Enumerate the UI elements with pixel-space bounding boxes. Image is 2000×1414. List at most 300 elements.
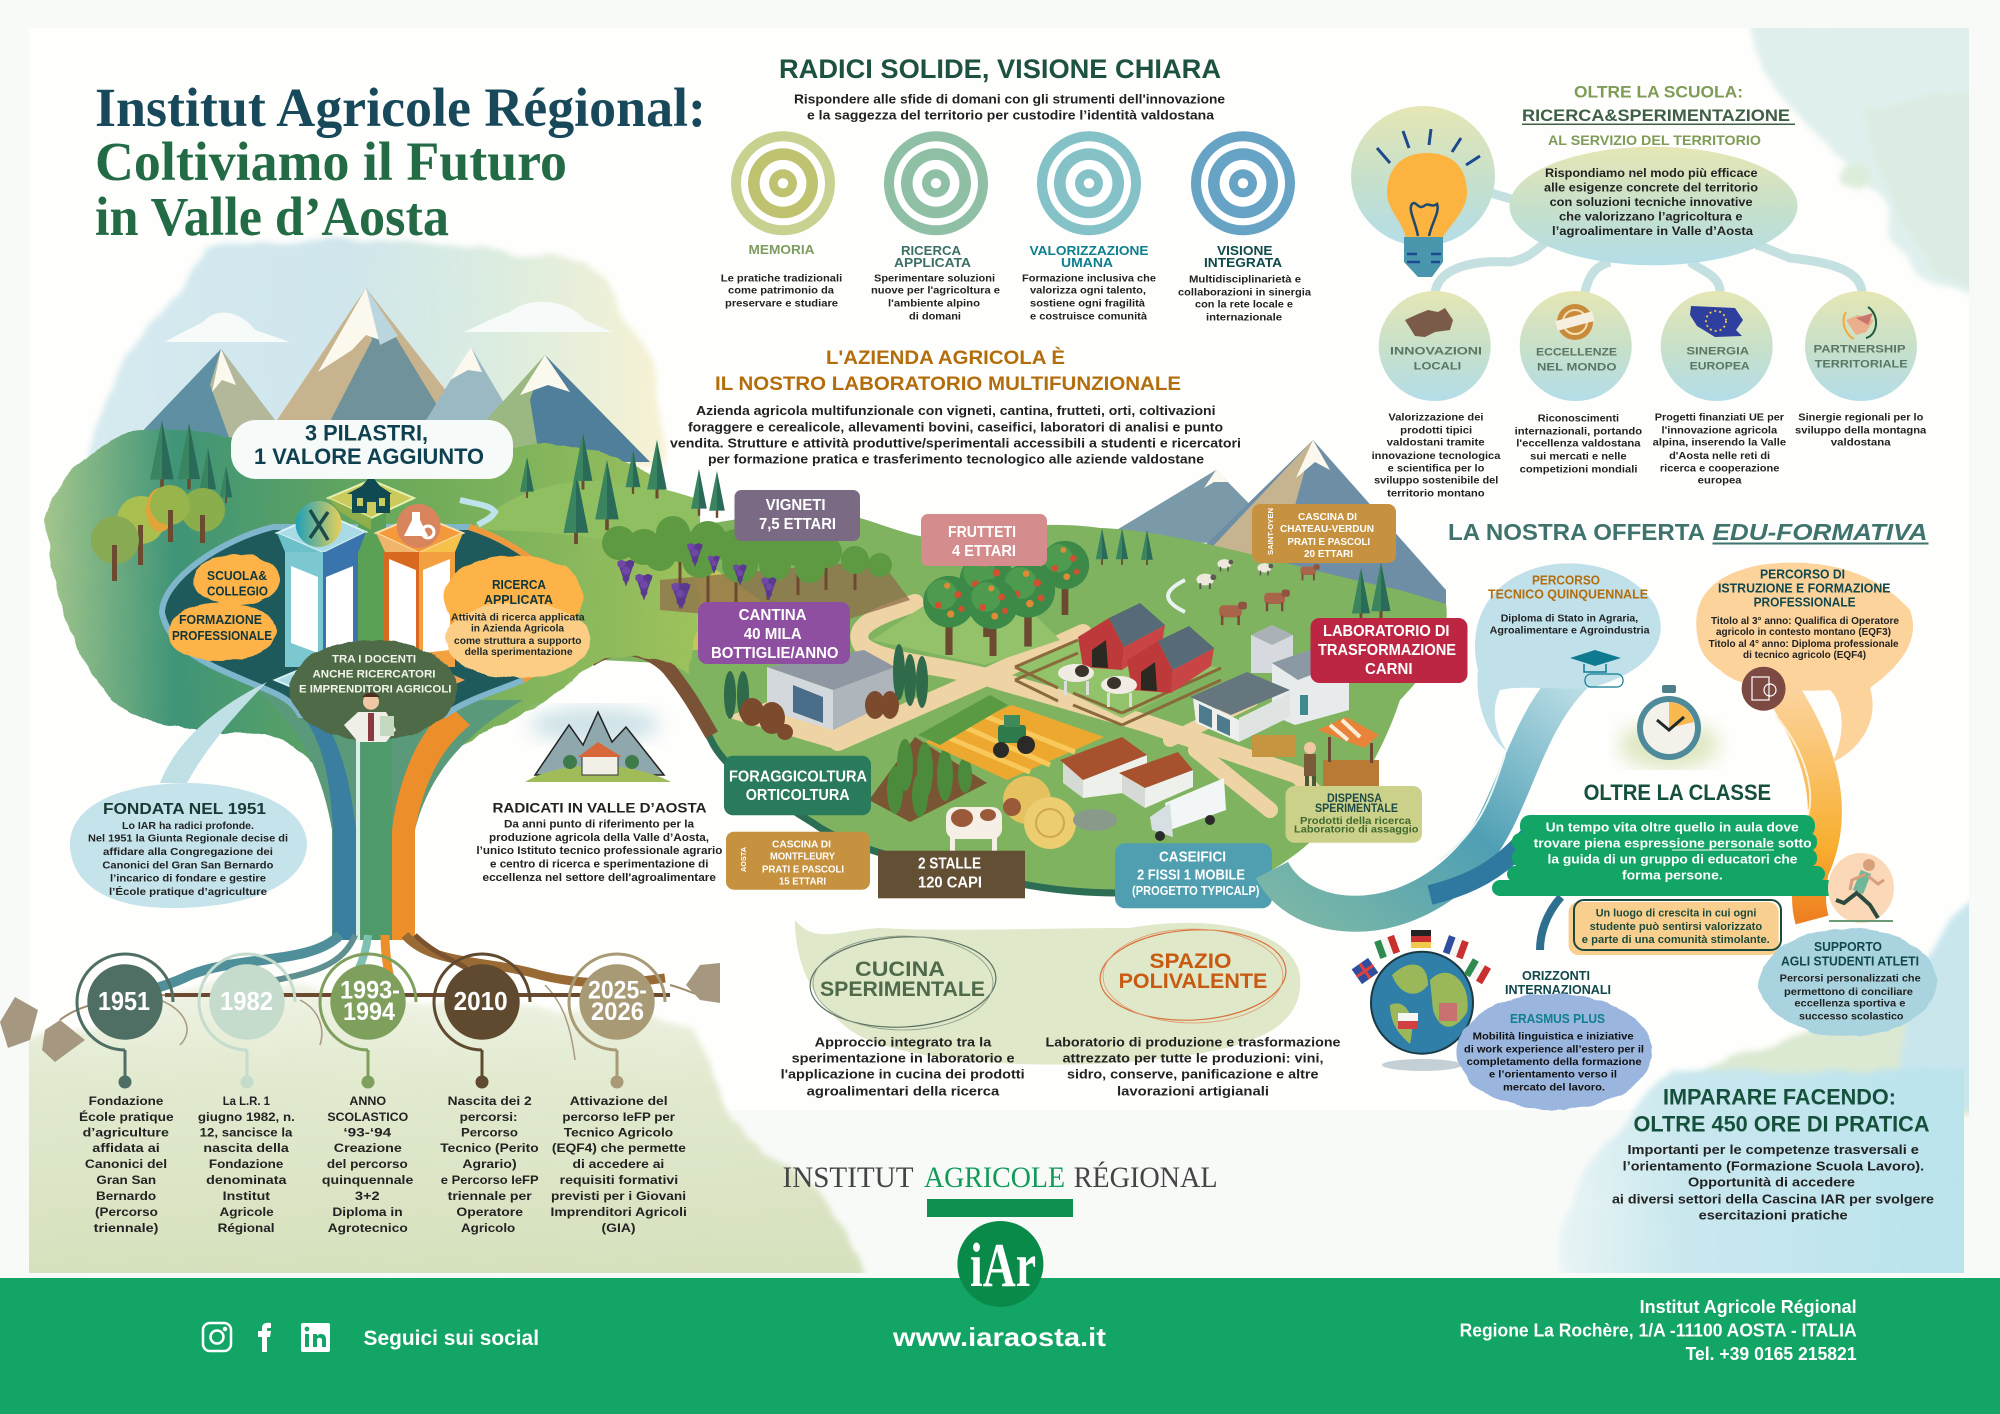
node: 1951	[77, 954, 173, 1088]
heading	[1448, 519, 1928, 545]
text: sinergia: d'Aosta nelle reti di	[1669, 450, 1770, 462]
text: 2010: Operatore	[456, 1205, 523, 1219]
callout: percorso istruzione: Titolo al 3° anno: Qualifica di Operatore	[1711, 616, 1899, 627]
text: 1993: quinquennale	[322, 1173, 414, 1187]
heading: cucina sperimentale: CUCINA	[855, 958, 945, 981]
label: caseifici: 2 FISSI 1 MOBILE	[1137, 866, 1245, 883]
callout: ricerca applicata: della sperimentazione	[465, 647, 573, 658]
label: caseifici	[1115, 843, 1272, 908]
icon: light bulb	[1351, 106, 1495, 277]
footer: address: Tel. +39 0165 215821	[1686, 1344, 1857, 1364]
node: 2010: 2010	[454, 986, 508, 1016]
illustration: tree canopy	[45, 420, 725, 777]
panel: imparare facendo: Importanti per le competenze trasversali e	[1628, 1142, 1919, 1157]
icon: facebook	[258, 1323, 271, 1352]
panel: imparare facendo: l’orientamento (Formazione Scuola Lavoro).	[1623, 1159, 1924, 1174]
label: laboratorio carni: TRASFORMAZIONE	[1318, 642, 1456, 659]
farm: crop field and tractor	[869, 695, 1104, 822]
text: 1951: Fondazione	[89, 1094, 164, 1108]
farm: pines right	[1096, 528, 1391, 622]
label: foraggicoltura: ORTICOLTURA	[746, 787, 850, 804]
farm: houses and truck	[1060, 737, 1226, 841]
text: visione integrata: Multidisciplinarietà e	[1189, 274, 1301, 286]
icon: ring ricerca	[884, 131, 988, 235]
farm: orchard	[872, 541, 1089, 665]
text: ricerca applicata: APPLICATA	[894, 255, 972, 270]
wash	[795, 920, 1300, 1065]
watercolour: bottom left wash	[20, 984, 866, 1285]
callout: ricerca applicata: Attività di ricerca applicata	[451, 613, 585, 624]
callout: supporto studenti atleti: Percorsi personalizzati che	[1780, 973, 1921, 985]
text: partnership: sviluppo della montagna	[1795, 425, 1926, 437]
callout: rispondiamo: Rispondiamo nel modo più efficace	[1545, 168, 1758, 180]
text: ricerca applicata: nuove per l'agricoltura e	[871, 285, 1000, 297]
callout: docenti: E IMPRENDITORI AGRICOLI	[299, 684, 452, 696]
farm: processing buildings	[1190, 625, 1349, 742]
callout: supporto studenti atleti: eccellenza sportiva e	[1794, 998, 1906, 1010]
text: 2025: Tecnico Agricolo	[564, 1126, 673, 1140]
text: 1951: Canonici del	[85, 1157, 167, 1171]
text: sinergia: l'innovazione agricola	[1662, 425, 1777, 437]
text: radicati in valle: eccellenza nel settore dell'agroalimentare	[482, 872, 716, 884]
label: cascina chateau-verdun: SAINT-OYEN	[1266, 508, 1275, 555]
item: partnership territoriale: TERRITORIALE	[1815, 358, 1908, 370]
callout: docenti: TRA I DOCENTI	[332, 654, 416, 666]
illustration: farm island ground	[530, 440, 1447, 893]
panel: imparare facendo: Opportunità di accedere	[1688, 1175, 1855, 1190]
label: cascina chateau-verdun	[1252, 504, 1396, 563]
text: valorizzazione umana: sostiene ogni fragilità	[1030, 298, 1145, 310]
callout: ricerca applicata: RICERCA	[492, 578, 546, 592]
text: 1993: ‘93-‘94	[343, 1126, 392, 1140]
callout: percorso tecnico: Agroalimentare e Agroindustria	[1490, 624, 1650, 636]
subtitle: e la saggezza del territorio per custodire l’identità valdostana	[807, 107, 1215, 122]
heading: 3 pilastri: 1 VALORE AGGIUNTO	[254, 444, 484, 469]
text: 1982: Régional	[218, 1221, 274, 1235]
text: valorizzazione umana: VALORIZZAZIONE	[1030, 243, 1149, 258]
text: innovazioni	[1372, 412, 1501, 500]
farm: barns	[1015, 603, 1221, 725]
label: laboratorio carni	[1310, 618, 1468, 683]
footer: address: Regione La Rochère, 1/A -11100 AOSTA - ITALIA	[1460, 1321, 1857, 1341]
callout: erasmus plus: ERASMUS PLUS	[1510, 1011, 1605, 1026]
heading: LA NOSTRA OFFERTA	[1448, 519, 1705, 545]
farm: vineyard	[602, 516, 910, 625]
label: cascina chateau-verdun: 20 ETTARI	[1304, 548, 1353, 560]
label: dispensa: Laboratorio di assaggio	[1294, 824, 1418, 836]
icon: instagram	[203, 1323, 231, 1351]
callout: fondata nel 1951	[70, 682, 307, 908]
item: partnership territoriale: PARTNERSHIP	[1814, 344, 1906, 356]
text: 1982: Agricole	[220, 1205, 274, 1219]
label: foraggicoltura	[724, 756, 871, 815]
label: dispensa	[1286, 786, 1422, 843]
callout: tempo vita: trovare piena espressione personale sotto	[1534, 836, 1812, 851]
callout: supporto studenti atleti: AGLI STUDENTI ATLETI	[1781, 954, 1919, 968]
node: 1993-1994: 1994	[343, 998, 395, 1026]
text: 2010	[440, 1094, 539, 1235]
text: 1993: Agrotecnico	[328, 1221, 408, 1235]
callout: docenti	[289, 640, 457, 742]
text: sinergia	[1653, 412, 1786, 487]
text: memoria: Le pratiche tradizionali	[721, 273, 842, 285]
text: 1982: La L.R. 1	[223, 1094, 270, 1108]
heading: azienda agricola: L'AZIENDA AGRICOLA È	[826, 346, 1065, 369]
label: vigneti: 7,5 ETTARI	[759, 516, 836, 533]
heading: spazio polivalente	[1098, 925, 1288, 1025]
dark leaf background	[162, 527, 573, 715]
text: valorizzazione umana	[1022, 243, 1156, 322]
logo	[782, 1161, 1218, 1307]
text: memoria: MEMORIA	[748, 242, 815, 257]
node: 2025-2026	[569, 954, 665, 1088]
heading: oltre la classe: OLTRE LA CLASSE	[1584, 780, 1771, 805]
text: eccellenze: Riconoscimenti	[1538, 413, 1619, 425]
text: 1993: ANNO	[349, 1094, 386, 1108]
text: innovazioni: e scientifica per lo	[1388, 463, 1484, 475]
callout: percorso istruzione: PERCORSO DI	[1760, 568, 1845, 582]
label: stalle: 120 CAPI	[918, 874, 982, 891]
callout: fondata nel 1951: l’incarico di fondare e gestire	[110, 873, 266, 885]
heading: orizzonti internazionali: ORIZZONTI	[1522, 969, 1590, 983]
heading: spazio polivalente: POLIVALENTE	[1119, 970, 1267, 993]
node: 2025-2026: 2025-	[588, 977, 647, 1005]
text: innovazioni: Valorizzazione dei	[1388, 412, 1484, 424]
text: spazio: sidro, conserve, panificazione e altre	[1067, 1067, 1318, 1082]
label: cantina: CANTINA	[739, 607, 807, 624]
icon: linkedin	[301, 1323, 330, 1352]
text: partnership: valdostana	[1831, 437, 1891, 449]
panel: imparare facendo	[1612, 1084, 1934, 1223]
heading: formazione: PROFESSIONALE	[172, 629, 272, 643]
label: dispensa: DISPENSA	[1327, 793, 1382, 805]
label: stalle: 2 STALLE	[918, 855, 981, 872]
callout: percorso istruzione: di tecnico agricolo (EQF4)	[1743, 650, 1866, 661]
watercolour: top right	[1750, 28, 1969, 295]
label: caseifici: (PROGETTO TYPICALP)	[1132, 884, 1260, 898]
heading: formazione	[167, 603, 277, 661]
callout: rispondiamo	[1510, 147, 1798, 265]
label: cascina chateau-verdun: CASCINA DI	[1298, 511, 1357, 523]
text: ricerca applicata	[871, 243, 1000, 322]
text: partnership	[1795, 412, 1926, 449]
heading: OLTRE LA SCUOLA:	[1574, 83, 1743, 101]
text: 1951: Gran San	[96, 1173, 156, 1187]
text: spazio: lavorazioni artigianali	[1117, 1084, 1269, 1099]
item: innovazioni locali: INNOVAZIONI	[1390, 346, 1482, 358]
item: eccellenze nel mondo	[1520, 291, 1632, 401]
heading: orizzonti internazionali: INTERNAZIONALI	[1505, 983, 1611, 997]
text: 1982: denominata	[206, 1173, 287, 1187]
node: 1982	[199, 954, 295, 1088]
text: innovazioni: sviluppo sostenibile del	[1374, 475, 1498, 487]
roots and vine	[60, 935, 720, 1060]
item: innovazioni locali: LOCALI	[1414, 360, 1461, 372]
timeline	[77, 954, 687, 1235]
logo: RÉGIONAL	[1074, 1161, 1218, 1194]
item: sinergia europea: SINERGIA	[1686, 346, 1749, 358]
text: 1993: SCOLASTICO	[327, 1110, 408, 1124]
text: ricerca applicata: di domani	[909, 310, 961, 322]
text: memoria: come patrimonio da	[728, 285, 834, 297]
callout: supporto studenti atleti: successo scolastico	[1799, 1011, 1904, 1023]
footer: address: Institut Agricole Régional	[1640, 1297, 1857, 1317]
callout: percorso tecnico: PERCORSO	[1532, 574, 1600, 588]
text: spazio	[1046, 1035, 1340, 1099]
callout: un luogo di crescita: studente può sentirsi valorizzato	[1590, 921, 1762, 933]
icon: tools	[296, 501, 342, 547]
heading: azienda agricola	[715, 346, 1181, 395]
text: eccellenze: l'eccellenza valdostana	[1516, 438, 1641, 450]
heading: orizzonti internazionali	[1505, 969, 1611, 997]
text: 1951: affidata ai	[92, 1141, 160, 1155]
heading: scuola: SCUOLA&	[207, 569, 267, 583]
label: cantina: 40 MILA	[744, 626, 802, 643]
callout: percorso tecnico: TECNICO QUINQUENNALE	[1488, 588, 1648, 602]
callout: un luogo di crescita	[1569, 900, 1781, 955]
heading: azienda agricola: IL NOSTRO LABORATORIO MULTIFUNZIONALE	[715, 373, 1181, 395]
heading: RADICI SOLIDE, VISIONE CHIARA	[779, 54, 1221, 84]
label: frutteti	[921, 514, 1047, 566]
text: 1951: d’agriculture	[83, 1126, 169, 1140]
text: visione integrata: collaborazioni in sinergia	[1178, 286, 1311, 298]
text: cucina: sperimentazione in laboratorio e	[792, 1051, 1015, 1066]
callout: fondata nel 1951: FONDATA NEL 1951	[103, 801, 266, 818]
text: 1951: Bernardo	[96, 1189, 156, 1203]
label: cantina	[698, 602, 850, 664]
text: 2025: previsti per i Giovani	[551, 1189, 686, 1203]
farm: animals	[1168, 559, 1320, 625]
text: 2010: Tecnico (Perito	[440, 1141, 539, 1155]
text: visione integrata: internazionale	[1206, 312, 1282, 324]
callout: fondata nel 1951: Nel 1951 la Giunta Regionale decise di	[88, 833, 288, 845]
icon: stopwatch	[1619, 685, 1719, 770]
logo: AGRICOLE	[924, 1161, 1065, 1194]
item: sinergia europea	[1661, 291, 1773, 401]
text: ricerca applicata: Sperimentare soluzioni	[874, 273, 995, 285]
pillar: right	[376, 515, 465, 700]
callout: ricerca applicata: come struttura a supporto	[454, 636, 582, 647]
text: innovazioni: territorio montano	[1387, 488, 1485, 500]
label: dispensa: Prodotti della ricerca	[1300, 815, 1411, 827]
node: 1951: 1951	[98, 986, 150, 1016]
callout: tempo vita: la guida di un gruppo di educatori che	[1548, 852, 1798, 867]
panel: imparare facendo: IMPARARE FACENDO:	[1663, 1084, 1896, 1109]
title	[95, 77, 706, 247]
label: frutteti: 4 ETTARI	[952, 543, 1016, 560]
text: 2025: requisiti formativi	[560, 1173, 678, 1187]
text: eccellenze: competizioni mondiali	[1520, 464, 1638, 476]
node: 1982: 1982	[220, 986, 273, 1016]
text: 1993: Diploma in	[332, 1205, 403, 1219]
text: azienda agricola: foraggere e cerealicole, allevamenti bovini, caseifici, laboratori di analisi e punto	[688, 421, 1223, 435]
text: 1951	[79, 1094, 174, 1235]
callout: tempo vita: Un tempo vita oltre quello in aula dove	[1546, 820, 1799, 835]
label: foraggicoltura: FORAGGICOLTURA	[729, 768, 867, 785]
item: eccellenze nel mondo: ECCELLENZE	[1536, 347, 1617, 359]
text: radicati in valle: produzione agricola della Valle d’Aosta,	[489, 832, 709, 844]
text: 1951: triennale)	[94, 1221, 158, 1235]
text: azienda agricola	[670, 404, 1241, 466]
text: visione integrata: con la rete locale e	[1195, 298, 1293, 310]
panel: cucina e spazio	[781, 920, 1340, 1099]
decoration: vine leaves	[0, 963, 720, 1062]
text: 1993: del percorso	[327, 1157, 408, 1171]
label: stalle	[878, 851, 1025, 898]
node: 2010	[434, 954, 530, 1088]
farm: winery	[724, 644, 928, 740]
callout: tempo vita	[1492, 815, 1836, 896]
text: 1982	[198, 1094, 295, 1235]
title: Coltiviamo il Futuro	[95, 131, 567, 192]
icon: globe with flags	[1352, 930, 1491, 1071]
farm: market stall	[1252, 717, 1379, 789]
callout: fondata nel 1951: Lo IAR ha radici profonde.	[122, 820, 254, 832]
subtitle	[794, 91, 1225, 122]
text: azienda agricola: per formazione pratica e trasferimento tecnologico alle aziende valdostane	[708, 452, 1204, 466]
label: caseifici: CASEIFICI	[1159, 849, 1226, 866]
heading: cucina sperimentale: SPERIMENTALE	[820, 978, 985, 1001]
text: radicati in valle	[476, 800, 723, 884]
text: visione integrata: VISIONE	[1217, 243, 1273, 258]
text: 1993: Creazione	[334, 1141, 402, 1155]
text: 2010: Agricolo	[461, 1221, 515, 1235]
text: 2010: e Percorso IeFP	[441, 1173, 539, 1187]
heading: spazio polivalente: SPAZIO	[1150, 950, 1232, 973]
callout: supporto studenti atleti: permettono di conciliare	[1784, 986, 1913, 998]
panel: blue wash behind imparare facendo	[1559, 1067, 1964, 1273]
text: eccellenze: internazionali, portando	[1515, 426, 1642, 438]
text: azienda agricola: vendita. Strutture e attività produttive/sperimentali accessibili a studenti e ricercatori	[670, 436, 1241, 450]
ribbon: blue	[1272, 675, 1575, 950]
callout: erasmus plus: di work experience all’estero per il	[1464, 1044, 1644, 1056]
text: 2010: Percorso	[461, 1126, 518, 1140]
callout: erasmus plus: mercato del lavoro.	[1503, 1082, 1605, 1094]
text: 1982: nascita della	[203, 1141, 289, 1155]
text: partnership: Sinergie regionali per lo	[1798, 412, 1923, 424]
text: sinergia: Progetti finanziati UE per	[1655, 412, 1784, 424]
panel: offerta edu-formativa	[1272, 519, 1928, 955]
callout: fondata nel 1951: l’École pratique d’agriculture	[109, 885, 267, 898]
callout: erasmus plus: completamento della formazione	[1467, 1056, 1642, 1068]
icon: valley village	[525, 707, 671, 782]
heading: oltre la classe	[1555, 770, 1785, 810]
text: 2025: (EQF4) che permette	[552, 1141, 686, 1155]
callout: un luogo di crescita: e parte di una comunità stimolante.	[1582, 934, 1770, 946]
text: sinergia: ricerca e cooperazione	[1660, 463, 1780, 475]
label: laboratorio carni: LABORATORIO DI	[1323, 623, 1450, 640]
label: dispensa: SPERIMENTALE	[1315, 803, 1398, 815]
callout: ricerca applicata: APPLICATA	[484, 593, 553, 607]
icon: school	[347, 475, 392, 513]
heading: scuola	[194, 555, 280, 605]
text: 2010: Agrario)	[462, 1157, 517, 1171]
text: cucina	[781, 1035, 1025, 1099]
title: in Valle d’Aosta	[95, 186, 449, 247]
text: 2025: percorso IeFP per	[562, 1110, 675, 1124]
text: radicati in valle: e centro di ricerca e sperimentazione di	[490, 858, 708, 870]
heading: formazione: FORMAZIONE	[179, 613, 262, 627]
text: 2025: (GIA)	[602, 1221, 636, 1235]
text: innovazioni: prodotti tipici	[1400, 425, 1472, 437]
panel: imparare facendo: OLTRE 450 ORE DI PRATICA	[1634, 1112, 1930, 1137]
text: seguici: Seguici sui social	[364, 1327, 539, 1350]
subtitle: Rispondere alle sfide di domani con gli strumenti dell'innovazione	[794, 91, 1225, 106]
text: radicati in valle: l’unico Istituto tecnico professionale agrario	[476, 845, 723, 857]
footer: website: www.iaraosta.it	[892, 1322, 1106, 1352]
callout: ricerca applicata: in Azienda Agricola	[471, 624, 564, 635]
text: 1982: 12, sancisce la	[200, 1126, 293, 1140]
callout: percorso istruzione: agricolo in contesto montano (EQF3)	[1716, 627, 1891, 638]
logo: INSTITUT	[782, 1161, 914, 1194]
item: eccellenze nel mondo: NEL MONDO	[1537, 361, 1617, 373]
label: cascina montfleury: PRATI E PASCOLI	[762, 863, 844, 875]
text: 1993: 3+2	[355, 1189, 380, 1203]
icon: runner	[1828, 853, 1894, 923]
callout: rispondiamo: con soluzioni tecniche innovative	[1550, 197, 1753, 209]
branches	[1435, 190, 1862, 292]
text: valorizzazione umana: valorizza ogni talento,	[1030, 285, 1146, 297]
text: 2010: percorsi:	[460, 1110, 518, 1124]
callout: percorso istruzione	[1696, 563, 1913, 762]
label: vigneti	[734, 490, 860, 541]
text: 2025: di accedere ai	[572, 1157, 664, 1171]
heading: RICERCA&SPERIMENTAZIONE	[1522, 107, 1790, 125]
callout: percorso istruzione: Titolo al 4° anno: Diploma professionale	[1709, 639, 1899, 650]
text: 1982: giugno 1982, n.	[198, 1110, 295, 1124]
text: valorizzazione umana: UMANA	[1061, 255, 1114, 270]
label: cascina montfleury: MONTFLEURY	[770, 850, 835, 862]
text: cucina: l'applicazione in cucina dei prodotti	[781, 1067, 1025, 1082]
panel: oltre la scuola	[1351, 83, 1926, 500]
text: spazio: Laboratorio di produzione e trasformazione	[1046, 1035, 1340, 1050]
node: 1993-1994	[320, 954, 416, 1088]
label: cascina chateau-verdun: PRATI E PASCOLI	[1288, 536, 1370, 548]
text: cucina: agroalimentari della ricerca	[807, 1084, 1000, 1099]
text: 2025: Imprenditori Agricoli	[550, 1205, 687, 1219]
text: 1982: Fondazione	[209, 1157, 284, 1171]
label: vigneti: VIGNETI	[766, 497, 826, 514]
panel: imparare facendo: ai diversi settori della Cascina IAR per svolgere	[1612, 1192, 1934, 1207]
heading	[1522, 83, 1795, 148]
callout: percorso istruzione: PROFESSIONALE	[1754, 596, 1856, 610]
icon: flask gear	[397, 504, 441, 548]
footer band	[0, 1278, 2000, 1414]
text: 2025: Attivazione del	[570, 1094, 668, 1108]
text: radicati in valle: RADICATI IN VALLE D’AOSTA	[492, 800, 706, 816]
label: cascina montfleury	[726, 832, 870, 890]
watercolour: bottom right	[1705, 899, 1969, 1117]
icon: ring valorizzazione	[1037, 131, 1141, 235]
panel: imparare facendo: esercitazioni pratiche	[1699, 1208, 1848, 1223]
title: Institut Agricole Régional:	[95, 77, 706, 138]
callout: percorso tecnico: Diploma di Stato in Agraria,	[1501, 612, 1638, 624]
callout: rispondiamo: l’agroalimentare in Valle d’Aosta	[1552, 226, 1754, 238]
text: ricerca applicata: RICERCA	[901, 243, 962, 258]
text: azienda agricola: Azienda agricola multifunzionale con vigneti, cantina, frutteti, orti, coltivazioni	[696, 404, 1216, 418]
item: sinergia europea: EUROPEA	[1690, 360, 1750, 372]
callout: fondata nel 1951: Canonici del Gran San Bernardo	[102, 860, 273, 872]
text: 2010: Nascita dei 2	[448, 1094, 532, 1108]
text: innovazioni: innovazione tecnologica	[1372, 450, 1501, 462]
callout: percorso tecnico	[1475, 563, 1661, 752]
callout: erasmus plus: e l’orientamento verso il	[1489, 1069, 1617, 1081]
label: cascina montfleury: CASCINA DI	[772, 838, 831, 850]
icon: ring memoria	[731, 131, 835, 235]
footer: address	[1460, 1297, 1857, 1364]
label: cantina: BOTTIGLIE/ANNO	[711, 645, 838, 662]
text: ricerca applicata: l'ambiente alpino	[888, 298, 980, 310]
